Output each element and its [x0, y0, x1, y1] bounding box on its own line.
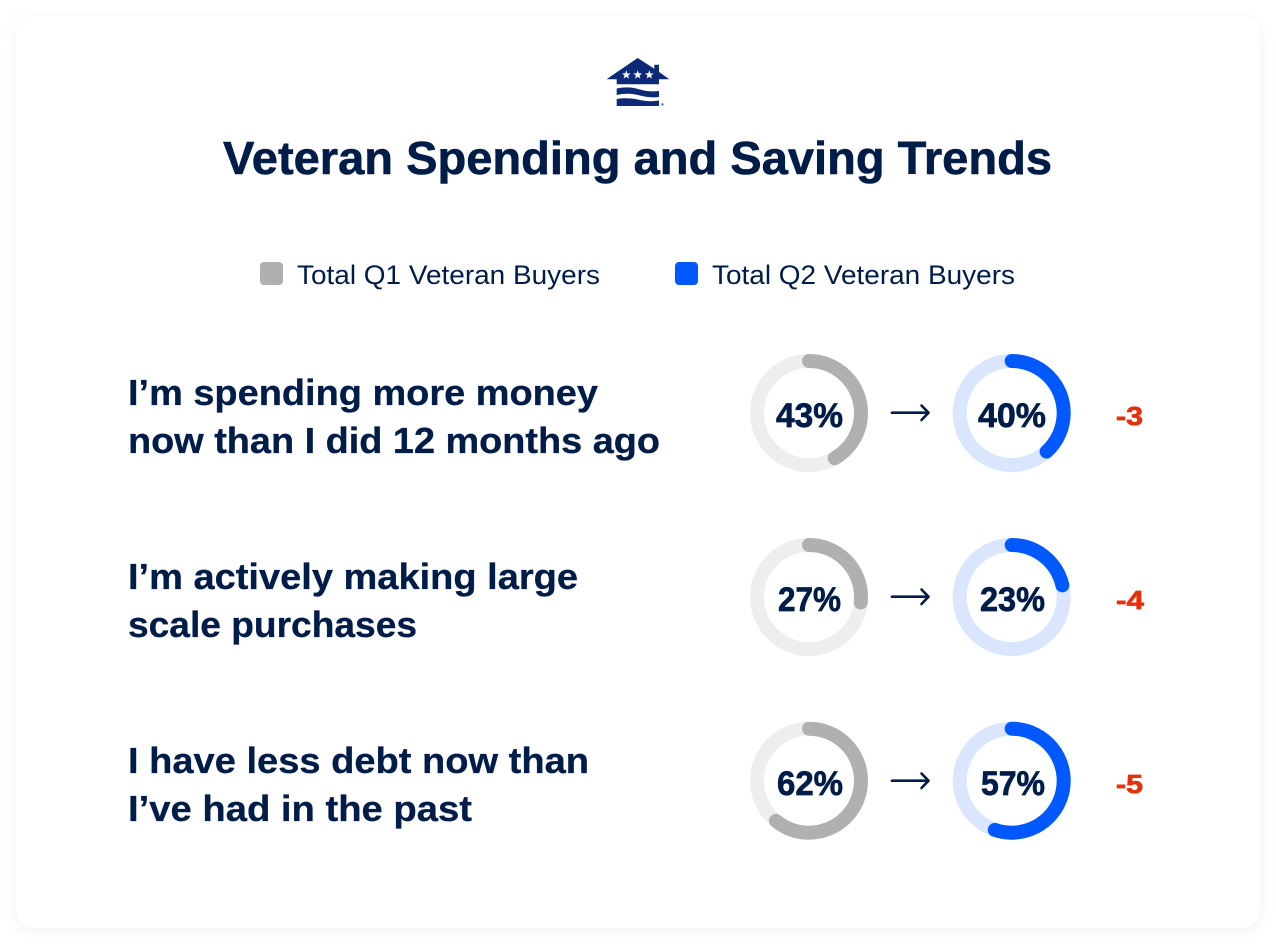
donut: Q2 57%	[960, 729, 1064, 833]
arrow	[892, 590, 928, 604]
row 1: spending more money	[128, 361, 1143, 465]
change: -4: -4	[1116, 585, 1145, 615]
donut: Q1 62%: 62%	[777, 765, 843, 803]
title: Veteran Spending and Saving Trends	[223, 132, 1052, 184]
legend item: Q2 label: Total Q2 Veteran Buyers	[712, 260, 1015, 290]
donut: Q2 57%: 57%	[981, 765, 1045, 803]
donut: Q2 40%	[960, 361, 1064, 465]
donut: Q1 27%	[757, 545, 861, 649]
donut: Q1 62%	[757, 729, 861, 833]
arrow	[892, 774, 928, 788]
donut: Q1 43%: 43%	[776, 397, 843, 435]
row 3 statement: I’ve had in the past	[128, 788, 472, 829]
row 1 statement: I’m spending more money	[128, 372, 598, 413]
arrow	[892, 406, 928, 420]
donut: Q1 27%: 27%	[778, 581, 841, 619]
donut: Q2 23%: 23%	[980, 581, 1045, 619]
row 3: less debt	[128, 729, 1143, 833]
change: -3: -3	[1116, 401, 1143, 431]
icon: house logo	[606, 58, 669, 106]
donut: Q1 43%	[757, 361, 861, 465]
legend item: Q2 swatch	[675, 262, 698, 285]
row 3 statement: I have less debt now than	[128, 740, 589, 781]
row 2 statement: I’m actively making large	[128, 556, 578, 597]
donut: Q2 23%	[960, 545, 1064, 649]
row 2: large scale purchases	[128, 545, 1145, 649]
row 1 statement: now than I did 12 months ago	[128, 420, 660, 461]
legend item: Q1 swatch	[260, 262, 283, 285]
legend	[260, 260, 1015, 290]
row 2 statement: scale purchases	[128, 604, 417, 645]
change: -5: -5	[1116, 769, 1143, 799]
legend item: Q1 label: Total Q1 Veteran Buyers	[297, 260, 600, 290]
donut: Q2 40%: 40%	[978, 397, 1046, 435]
